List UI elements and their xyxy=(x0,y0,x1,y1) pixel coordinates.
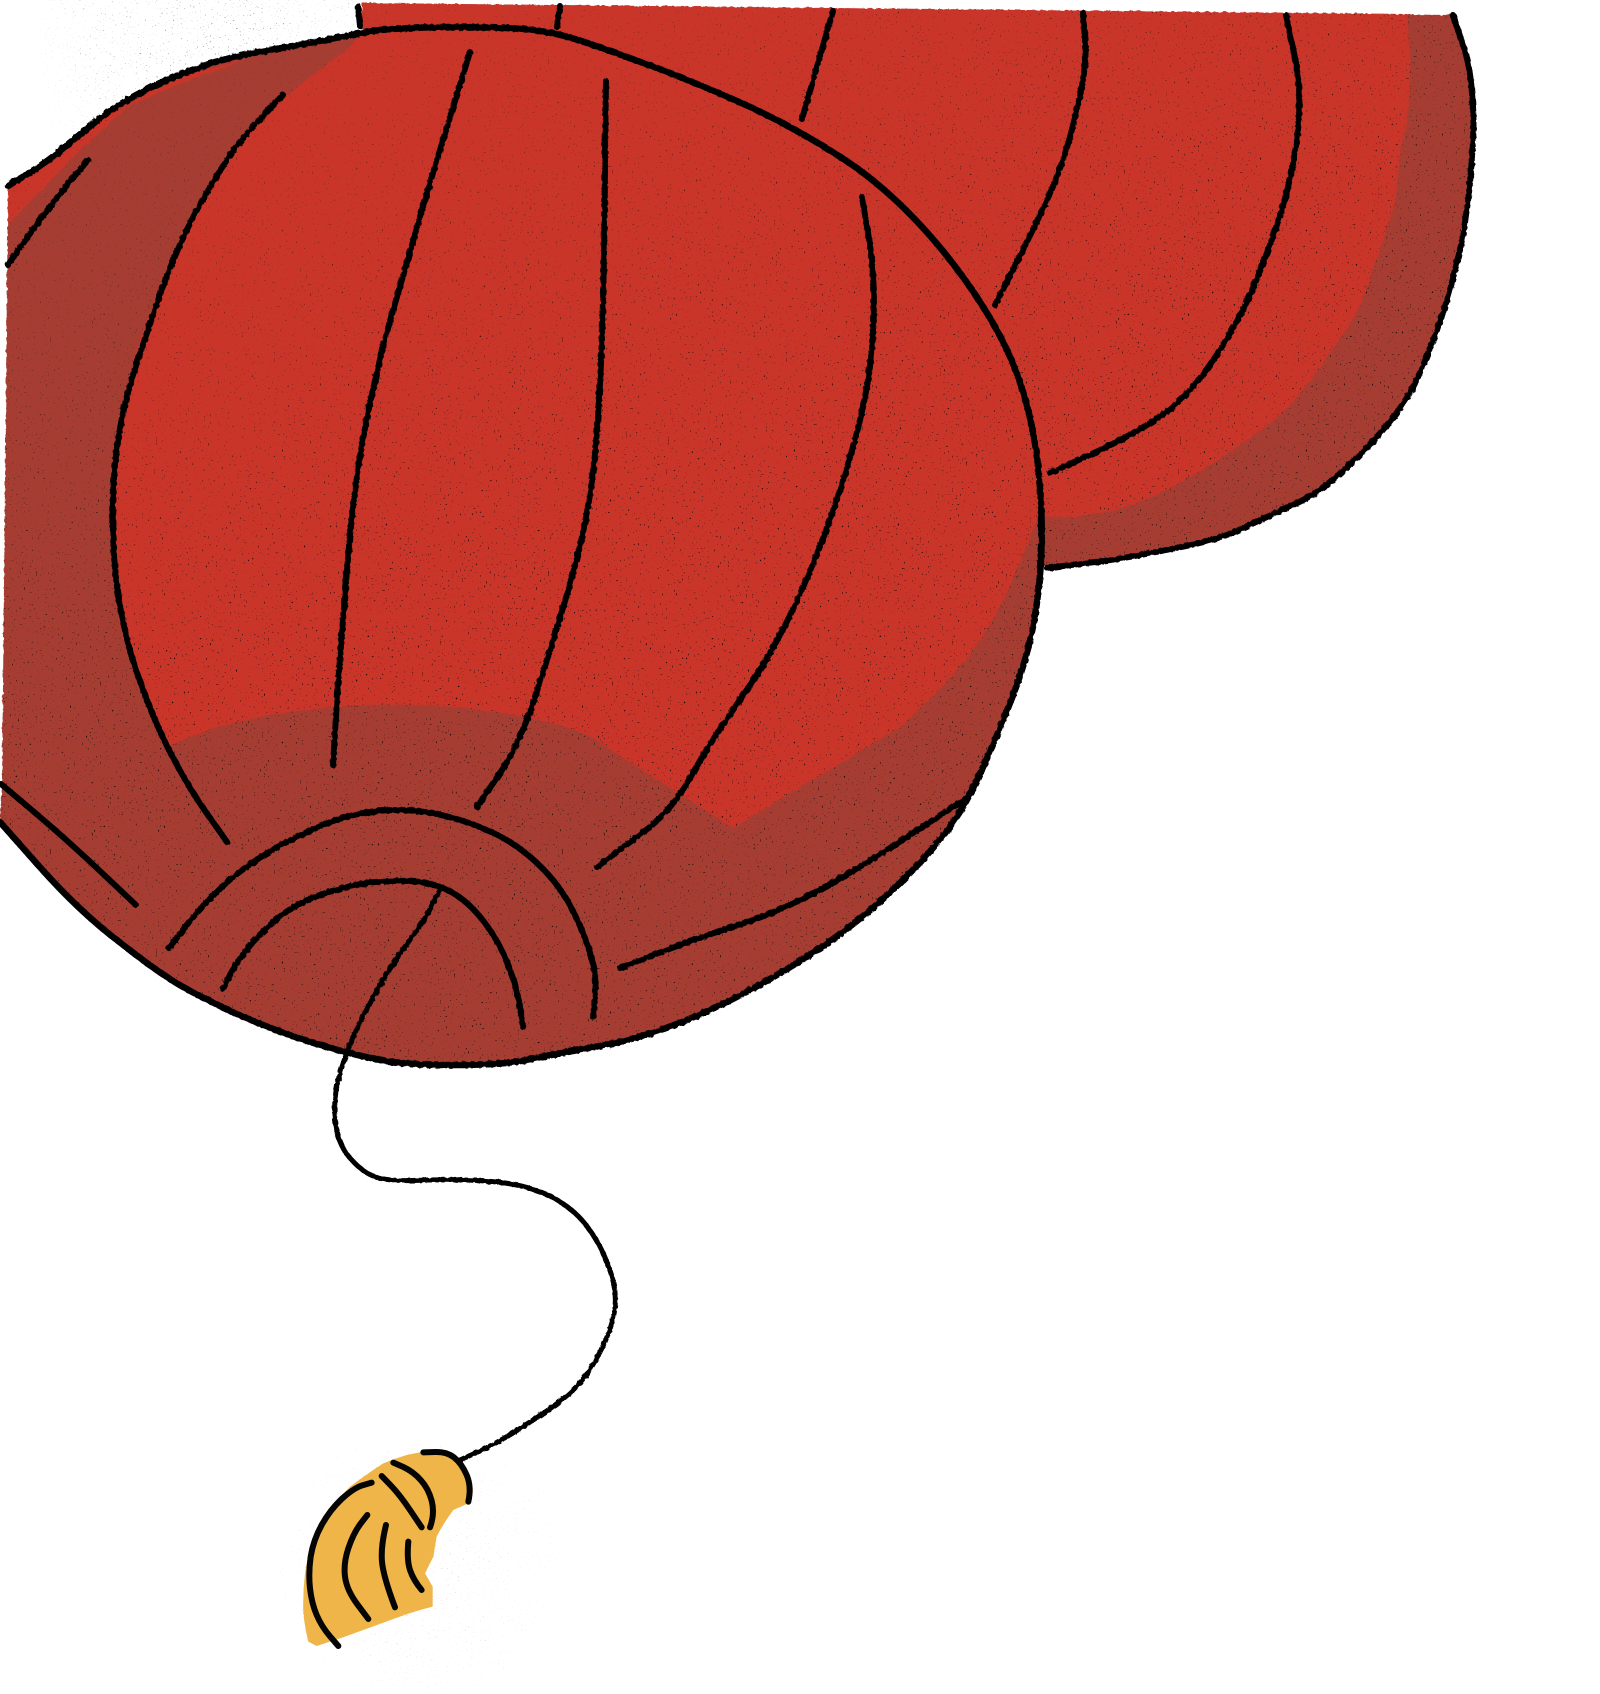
tassel body xyxy=(303,1450,473,1646)
lantern: front large xyxy=(0,20,1050,1070)
spray speckles behind the lantern xyxy=(40,0,356,134)
front lantern red sliver top-left xyxy=(8,58,250,225)
hanging string xyxy=(335,890,615,1460)
front lantern shadow body xyxy=(0,27,1042,1065)
back lantern shadow body xyxy=(362,3,1474,568)
back lantern outline xyxy=(1047,15,1474,568)
front lantern outline xyxy=(0,27,1042,1065)
front lantern grain xyxy=(0,20,1050,1070)
lantern: back right xyxy=(358,0,1480,575)
back lantern grain xyxy=(360,0,1480,575)
spray speckles around tassel xyxy=(274,1424,564,1694)
front lantern ribs xyxy=(1,52,967,1027)
front lantern lit area xyxy=(116,27,1042,828)
tassel strands xyxy=(309,1452,470,1646)
back lantern lit area xyxy=(362,3,1410,517)
back lantern ribs xyxy=(358,6,1299,473)
tassel xyxy=(303,1450,473,1646)
